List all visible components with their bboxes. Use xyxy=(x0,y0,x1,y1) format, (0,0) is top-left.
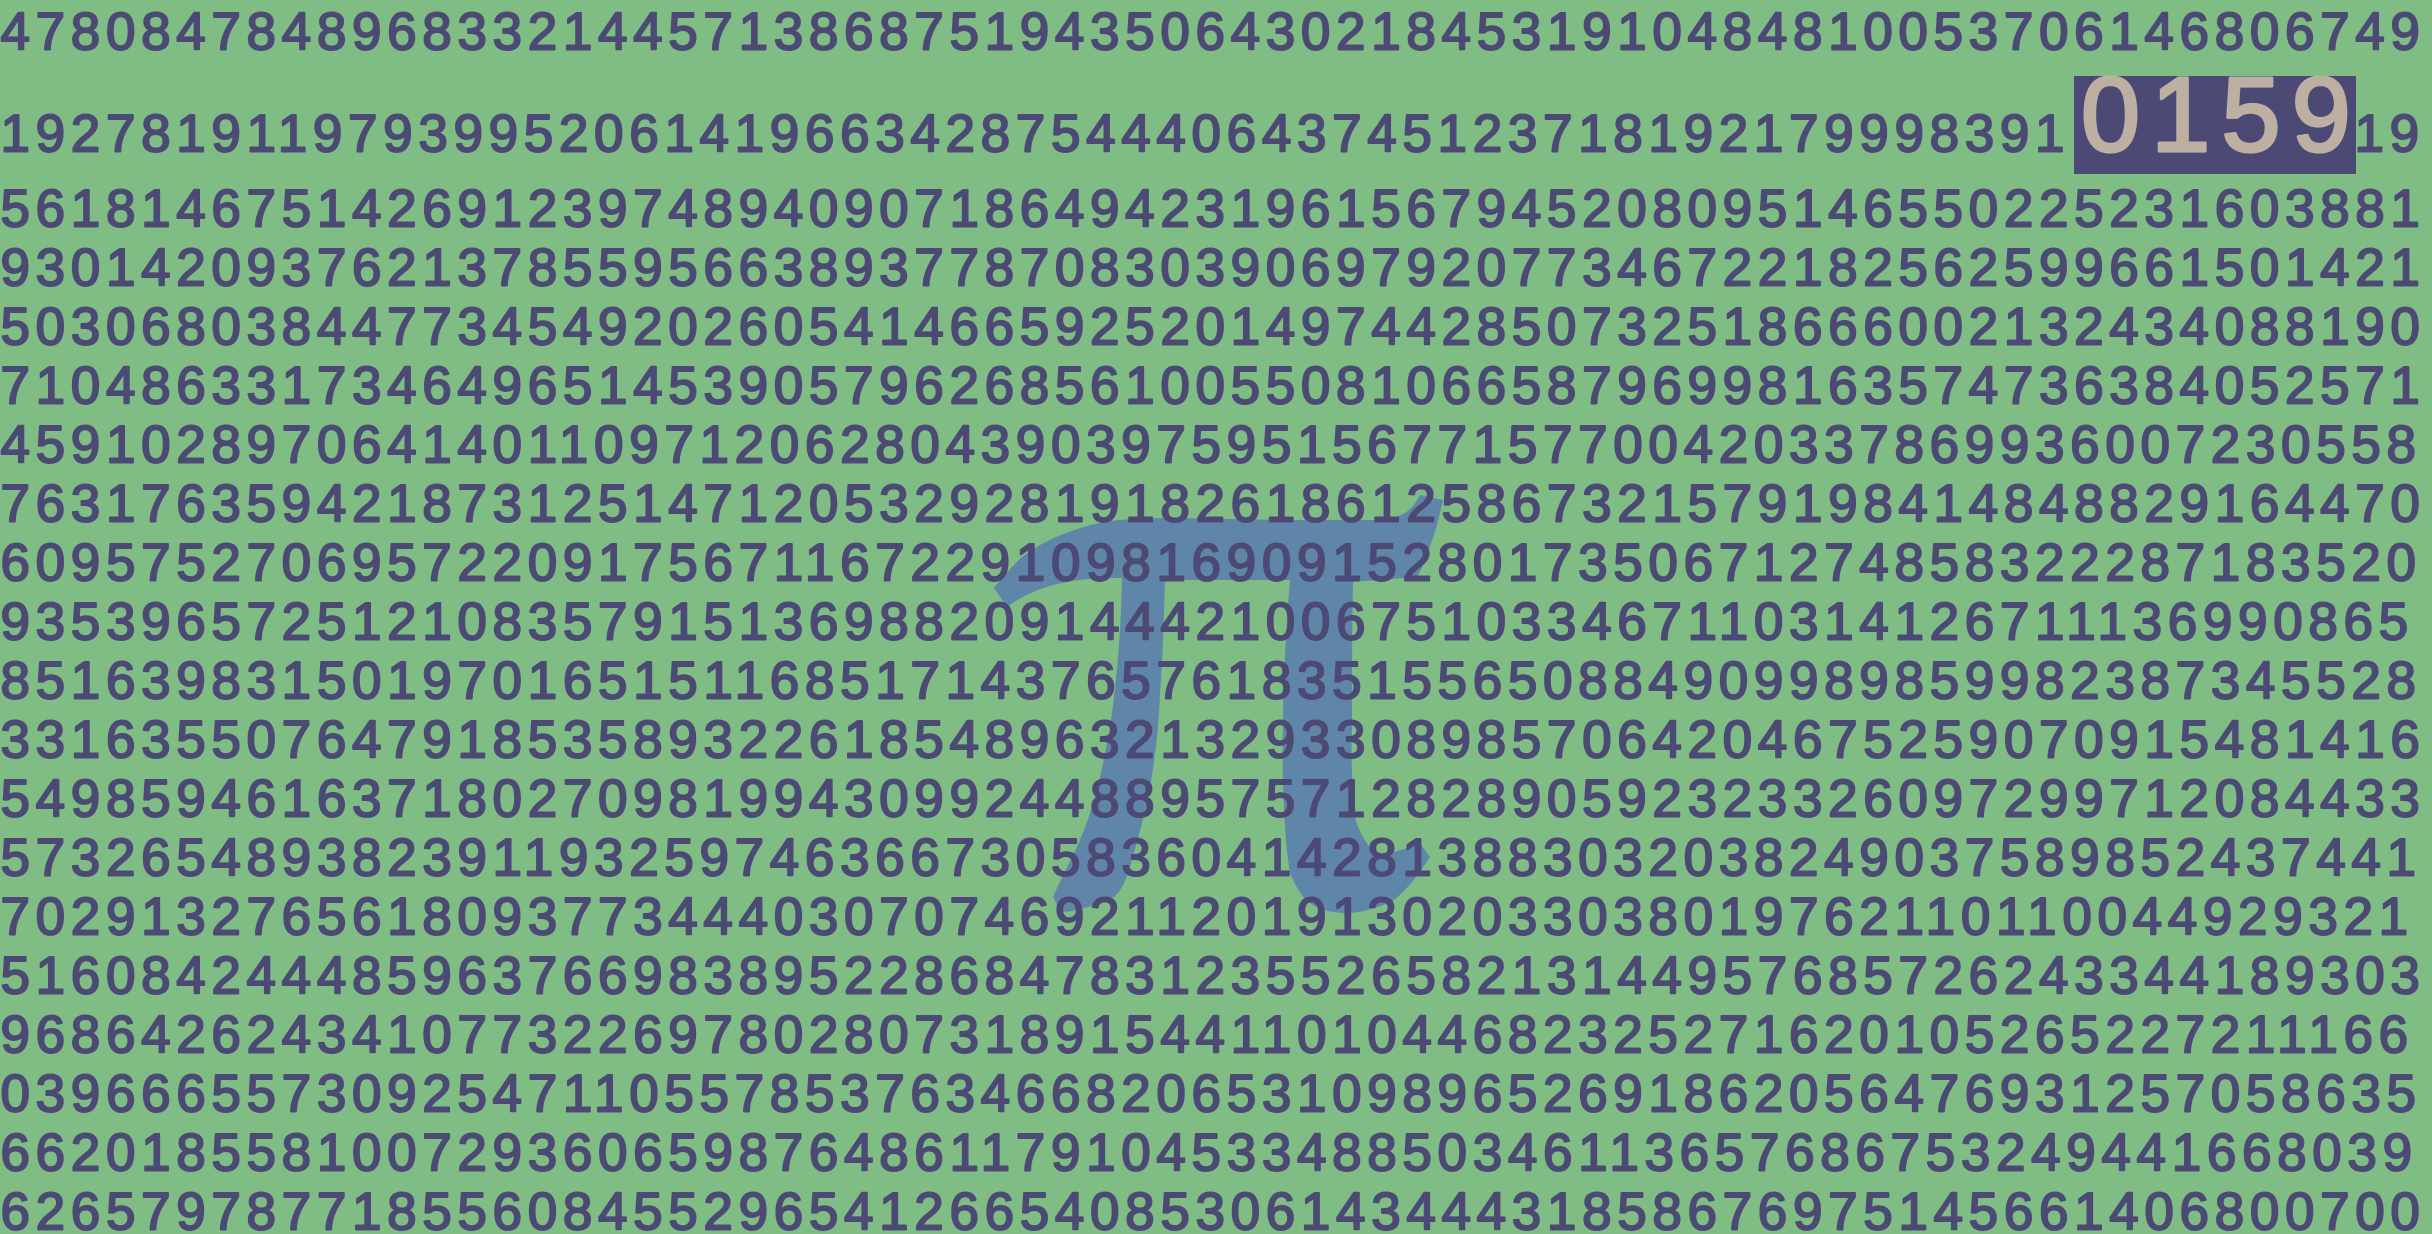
row 15 of digits: 702913276561809377344403070746921120191302033038019762110110044929321 xyxy=(0,888,2414,946)
row 16 of digits: 516084244485963766983895228684783123552658213144957685726243344189303 xyxy=(0,946,2426,1006)
row 3 of digits: 561814675142691239748940907186494231961567945208095146550225231603881 xyxy=(0,180,2426,238)
row 10 of digits: 935396572512108357915136988209144421006751033467110314126711136990865 xyxy=(0,592,2414,652)
row 7 of digits: 459102897064140110971206280439039759515677157700420337869936007230558 xyxy=(0,416,2422,474)
row 2 of digits, left part: 19278191197939952061419663428754440643745123718192179998391 xyxy=(0,104,2070,164)
row 13 of digits: 549859461637180270981994309924488957571282890592323326097299712084433 xyxy=(0,770,2426,828)
row 5 of digits: 503068038447734549202605414665925201497442850732518666002132434088190 xyxy=(0,298,2426,356)
row 9 of digits: 609575270695722091756711672291098169091528017350671274858322287183520 xyxy=(0,534,2422,592)
row 4 of digits: 930142093762137855956638937787083039069792077346722182562599661501421 xyxy=(0,238,2426,298)
highlighted digits box xyxy=(2074,56,2362,174)
row 1 of digits: 478084784896833214457138687519435064302184531910484810053706146806749 xyxy=(0,2,2426,62)
row 14 of digits: 573265489382391193259746366730583604142813883032038249037589852437441 xyxy=(0,828,2422,888)
highlighted number 0159: 0159 xyxy=(2081,56,2362,174)
row 6 of digits: 710486331734649651453905796268561005508106658796998163574736384052571 xyxy=(0,356,2426,416)
row 8 of digits: 763176359421873125147120532928191826186125867321579198414848829164470 xyxy=(0,474,2426,534)
row 17 of digits: 968642624341077322697802807318915441101044682325271620105265227211166 xyxy=(0,1006,2414,1064)
row 18 of digits: 039666557309254711055785376346682065310989652691862056476931257058635 xyxy=(0,1064,2422,1124)
row 11 of digits: 851639831501970165151168517143765761835155650884909989859982387345528 xyxy=(0,652,2422,710)
row 19 of digits: 662018558100729360659876486117910453348850346113657686753249441668039 xyxy=(0,1124,2418,1182)
icon: large pi symbol xyxy=(994,495,1443,913)
row 12 of digits: 331635507647918535893226185489632132933089857064204675259070915481416 xyxy=(0,710,2426,770)
row 2 of digits, right part: 19 xyxy=(2354,104,2425,164)
